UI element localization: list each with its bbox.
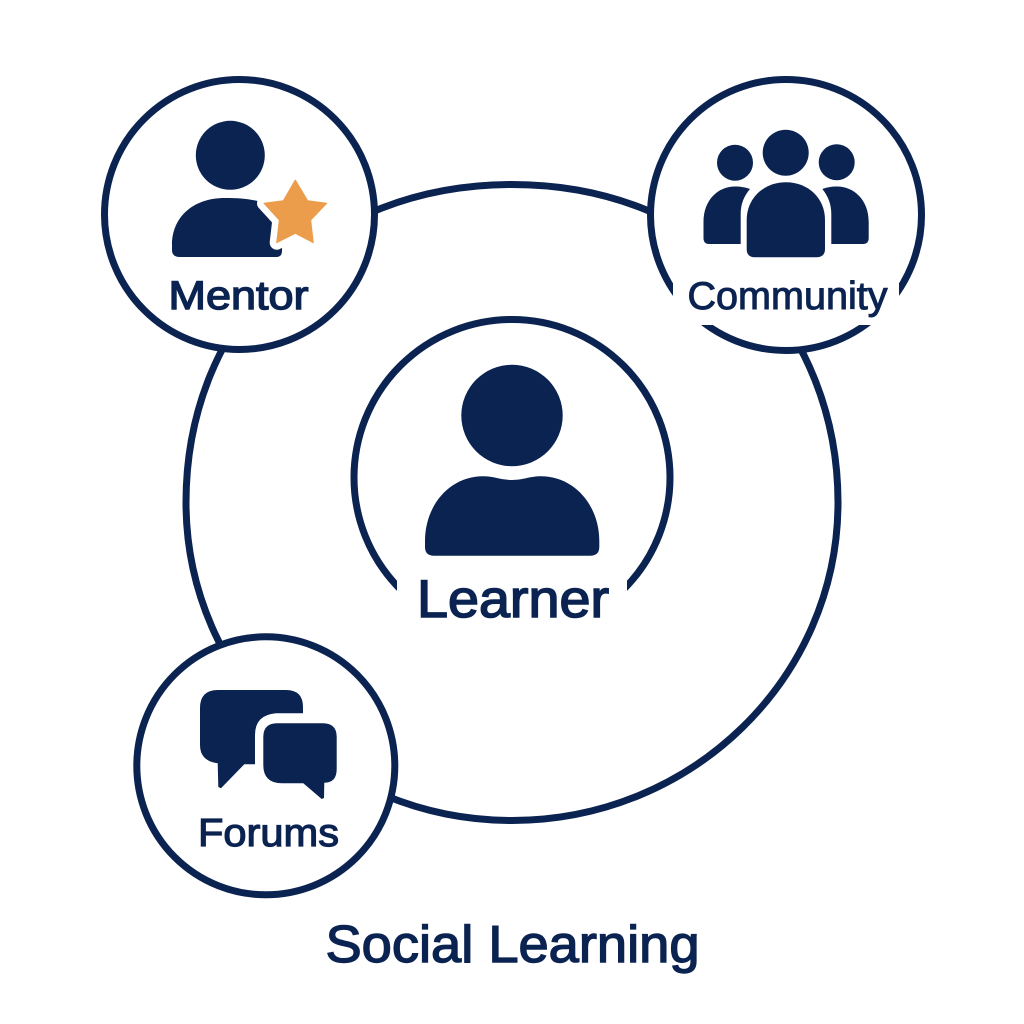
outer orbit ring <box>186 184 838 820</box>
icon: mentor person with star <box>172 121 327 257</box>
label: Forums: Forums <box>198 812 339 855</box>
icon: community group <box>704 130 869 257</box>
panel: community <box>650 80 922 350</box>
icon: chat bubbles <box>200 690 337 799</box>
label: Learner: Learner <box>417 570 609 629</box>
icon: learner person <box>425 365 599 556</box>
panel: mentor <box>104 80 374 350</box>
title: Social Learning <box>326 916 700 974</box>
label: Mentor: Mentor <box>168 274 308 318</box>
panel: forums <box>137 637 395 895</box>
label: Community: Community <box>688 275 888 318</box>
panel: learner <box>354 320 670 650</box>
